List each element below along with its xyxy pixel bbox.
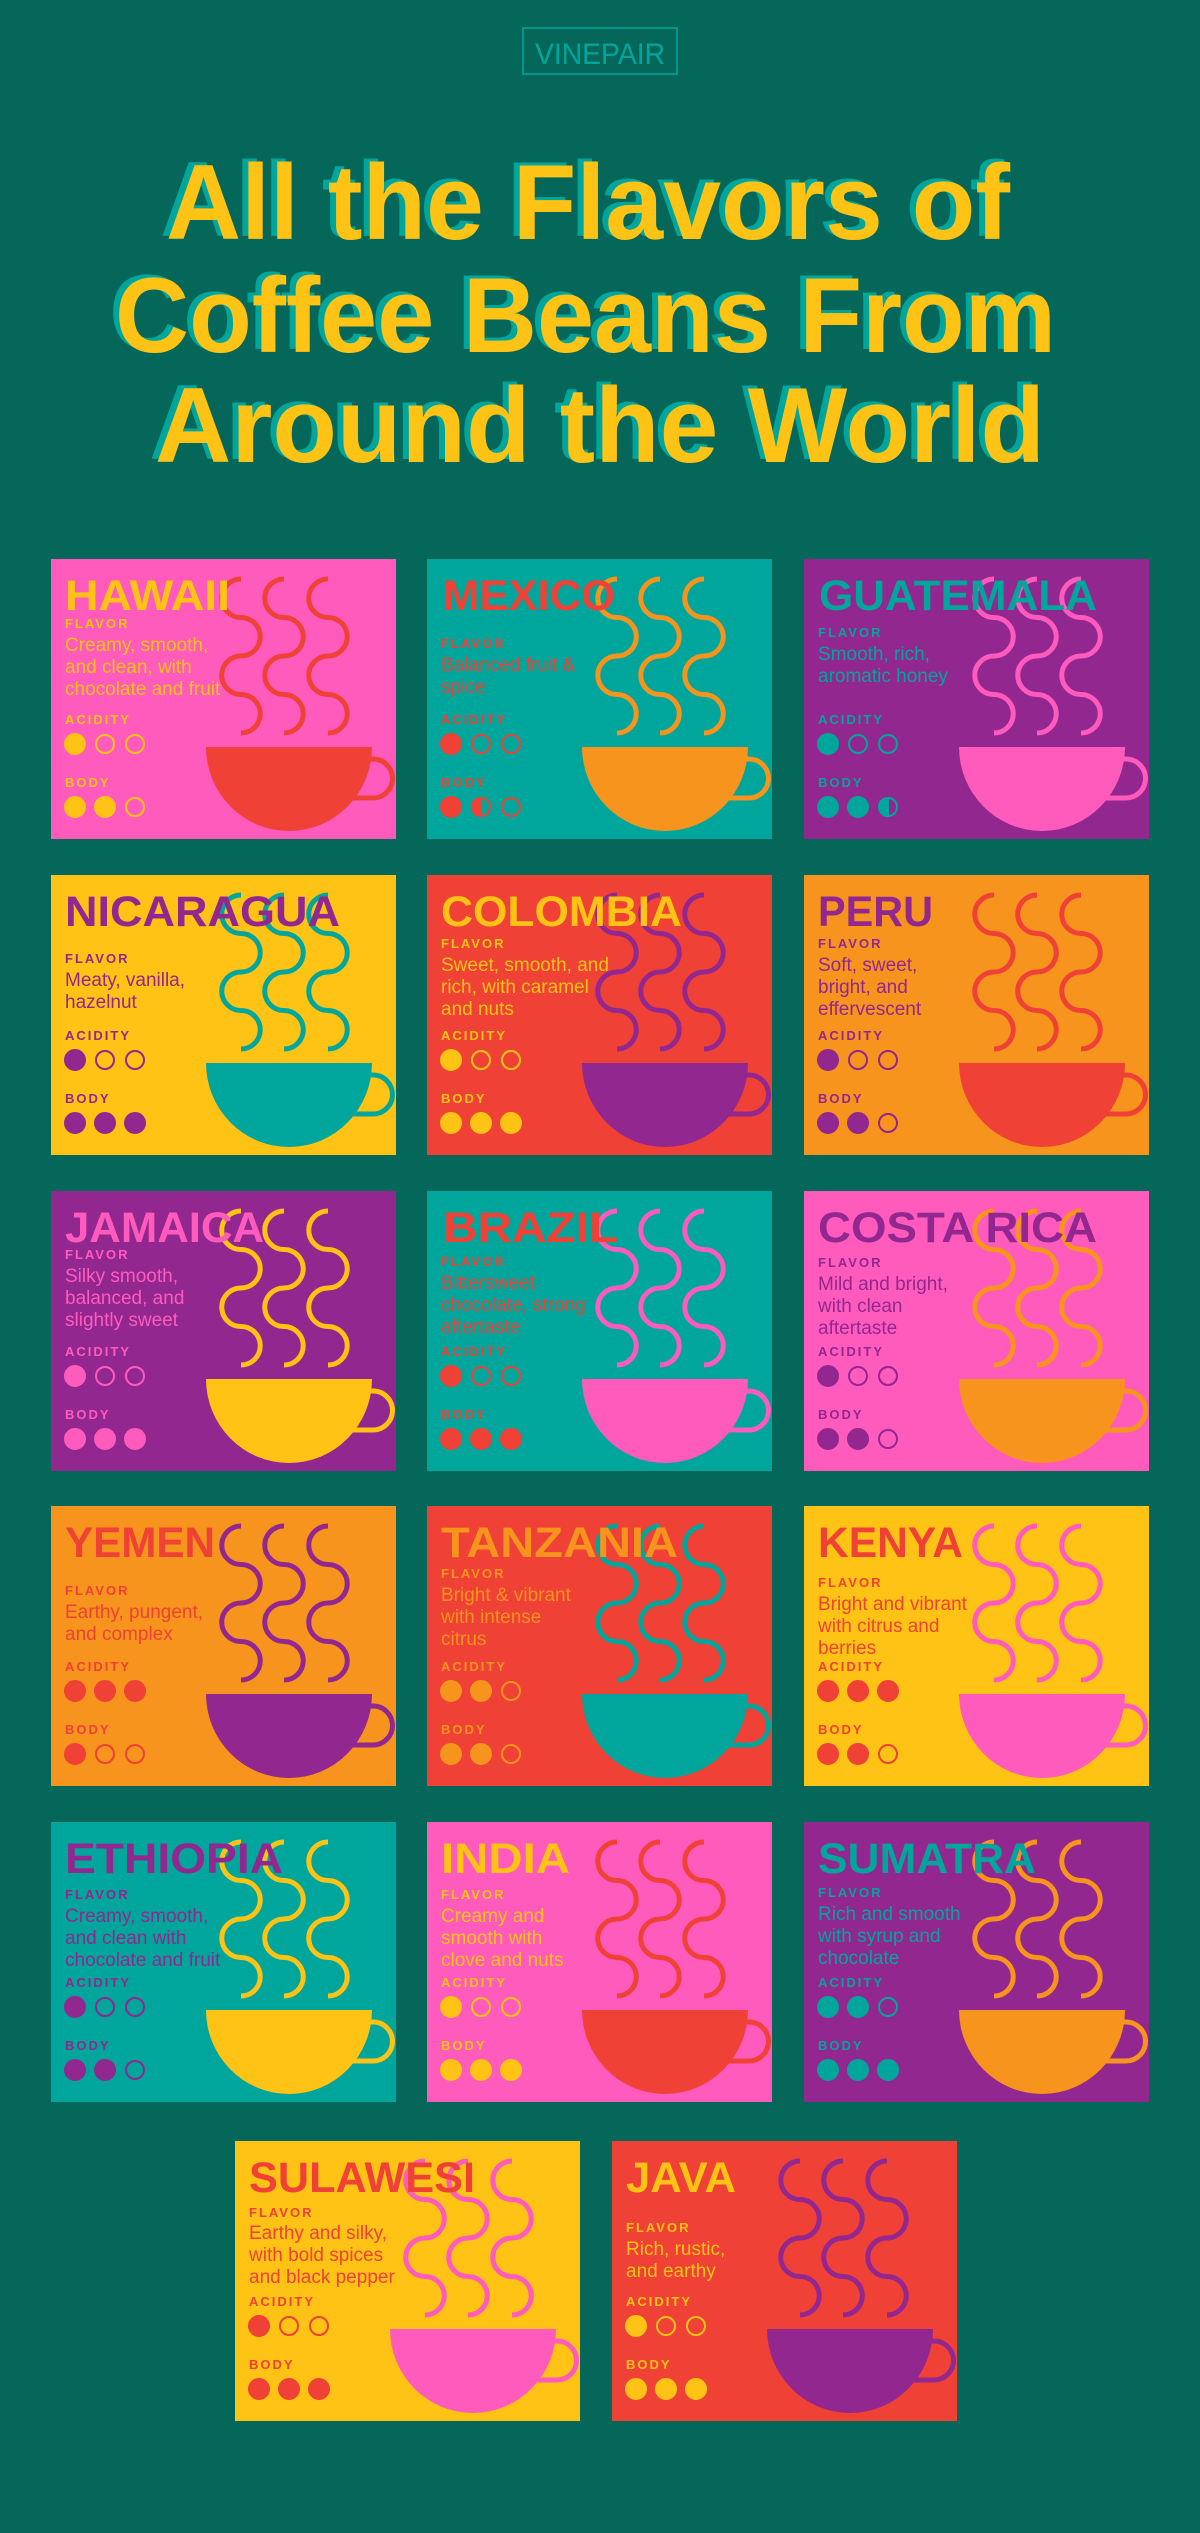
panel: Brazil [427, 1191, 772, 1471]
panel: Brazil: aftertaste [441, 1317, 520, 1338]
panel: Jamaica: BODY [65, 1407, 111, 1422]
panel: India: smooth with [441, 1928, 542, 1949]
panel: Guatemala [804, 559, 1149, 839]
title: Coffee Beans From [109, 252, 1050, 372]
panel: Colombia: rich, with caramel [441, 977, 589, 998]
panel: Mexico [427, 559, 772, 839]
panel: Java: BODY [626, 2357, 672, 2372]
panel: Mexico: spice [441, 677, 485, 698]
panel: Nicaragua: Meaty, vanilla, [65, 970, 185, 991]
panel: Costa Rica: BODY [818, 1407, 864, 1422]
panel: Hawaii: BODY [65, 775, 111, 790]
panel: Brazil: FLAVOR [441, 1254, 505, 1269]
panel: Yemen: Earthy, pungent, [65, 1602, 203, 1623]
panel: Sumatra: FLAVOR [818, 1885, 882, 1900]
panel: Mexico: ACIDITY [441, 712, 507, 727]
panel: Java [612, 2141, 957, 2421]
panel: Jamaica: slightly sweet [65, 1310, 179, 1331]
panel: Costa Rica: Mild and bright, [818, 1274, 948, 1295]
panel: Nicaragua: hazelnut [65, 992, 138, 1013]
panel: Tanzania: ACIDITY [441, 1659, 507, 1674]
panel: Brazil: BRAZIL [443, 1204, 618, 1252]
panel: Sumatra: with syrup and [817, 1926, 941, 1947]
panel: Guatemala: GUATEMALA [819, 572, 1097, 620]
logo: VinePair [523, 28, 677, 74]
panel: India: Creamy and [441, 1906, 544, 1927]
panel: Jamaica: ACIDITY [65, 1344, 131, 1359]
panel: Kenya: FLAVOR [818, 1575, 882, 1590]
panel: Nicaragua: ACIDITY [65, 1028, 131, 1043]
panel: Peru: ACIDITY [818, 1028, 884, 1043]
panel: Sulawesi: SULAWESI [249, 2154, 475, 2202]
title: Around the World [149, 362, 1039, 482]
panel: Nicaragua [51, 875, 396, 1155]
panel: Peru: Soft, sweet, [818, 955, 917, 976]
panel: Mexico: Balanced fruit & [441, 655, 575, 676]
panel: Sumatra: BODY [818, 2038, 864, 2053]
panel: Jamaica [51, 1191, 396, 1471]
panel: Tanzania: FLAVOR [441, 1566, 505, 1581]
panel: Jamaica: balanced, and [65, 1288, 184, 1309]
panel: Yemen: ACIDITY [65, 1659, 131, 1674]
panel: Sulawesi: FLAVOR [249, 2205, 313, 2220]
panel: Java: Rich, rustic, [626, 2239, 725, 2260]
panel: Sulawesi [235, 2141, 580, 2421]
panel: India: INDIA [441, 1835, 570, 1883]
panel: Kenya: ACIDITY [818, 1659, 884, 1674]
panel: Hawaii: and clean, with [65, 657, 192, 678]
panel: Peru: effervescent [818, 999, 922, 1020]
panel: Ethiopia: Creamy, smooth, [65, 1906, 208, 1927]
panel: Peru: FLAVOR [818, 936, 882, 951]
panel: Sulawesi: BODY [249, 2357, 295, 2372]
panel: Colombia: and nuts [441, 999, 514, 1020]
title: All the Flavors of [160, 139, 1004, 259]
panel: Tanzania: Bright & vibrant [441, 1585, 572, 1606]
panel: Costa Rica: ACIDITY [818, 1344, 884, 1359]
panel: India [427, 1822, 772, 2102]
panel: Ethiopia: ACIDITY [65, 1975, 131, 1990]
panel: Sulawesi: Earthy and silky, [249, 2223, 387, 2244]
panel: Tanzania: TANZANIA [441, 1519, 678, 1567]
panel: Ethiopia: FLAVOR [65, 1887, 129, 1902]
panel: Sumatra: Rich and smooth [818, 1904, 961, 1925]
panel: India: clove and nuts [441, 1950, 564, 1971]
panel: Tanzania: BODY [441, 1722, 487, 1737]
panel: Guatemala: aromatic honey [818, 666, 948, 687]
panel: Colombia [427, 875, 772, 1155]
panel: Jamaica: Silky smooth, [65, 1266, 178, 1287]
panel: Kenya [804, 1506, 1149, 1786]
panel: Kenya: BODY [818, 1722, 864, 1737]
panel: Nicaragua: BODY [65, 1091, 111, 1106]
panel: Mexico: FLAVOR [441, 636, 505, 651]
panel: Brazil: Bittersweet [441, 1273, 536, 1294]
panel: Mexico: BODY [441, 775, 487, 790]
panel: Costa Rica: FLAVOR [818, 1255, 882, 1270]
panel: Ethiopia: BODY [65, 2038, 111, 2053]
panel: Kenya: Bright and vibrant [818, 1594, 968, 1615]
panel: Colombia: Sweet, smooth, and [441, 955, 609, 976]
panel: Colombia: COLOMBIA [441, 888, 682, 936]
panel: Tanzania: citrus [441, 1629, 486, 1650]
panel: Hawaii [51, 559, 396, 839]
title: Around the World [155, 365, 1045, 485]
panel: India: ACIDITY [441, 1975, 507, 1990]
panel: Kenya: berries [818, 1638, 876, 1659]
panel: Colombia: ACIDITY [441, 1028, 507, 1043]
panel: Peru: PERU [818, 888, 933, 936]
panel: Peru [804, 875, 1149, 1155]
panel: Ethiopia: and clean with [65, 1928, 186, 1949]
panel: Java: FLAVOR [626, 2220, 690, 2235]
panel: Costa Rica: COSTA RICA [818, 1204, 1097, 1252]
panel: Ethiopia [51, 1822, 396, 2102]
panel: Brazil: BODY [441, 1407, 487, 1422]
panel: Yemen [51, 1506, 396, 1786]
panel: Hawaii: FLAVOR [65, 616, 129, 631]
panel: Yemen: BODY [65, 1722, 111, 1737]
panel: Colombia: BODY [441, 1091, 487, 1106]
panel: Sumatra [804, 1822, 1149, 2102]
panel: India: FLAVOR [441, 1887, 505, 1902]
panel: Peru: BODY [818, 1091, 864, 1106]
panel: Ethiopia: chocolate and fruit [65, 1950, 221, 1971]
panel: Costa Rica: with clean [817, 1296, 902, 1317]
panel: Colombia: FLAVOR [441, 936, 505, 951]
panel: Costa Rica [804, 1191, 1149, 1471]
panel: Java: ACIDITY [626, 2294, 692, 2309]
panel: Brazil: chocolate, strong [441, 1295, 586, 1316]
panel: Kenya: with citrus and [817, 1616, 939, 1637]
panel: Hawaii: HAWAII [65, 572, 230, 620]
panel: India: BODY [441, 2038, 487, 2053]
panel: Brazil: ACIDITY [441, 1344, 507, 1359]
panel: Nicaragua: NICARAGUA [65, 888, 340, 936]
panel: Hawaii: ACIDITY [65, 712, 131, 727]
panel: Sumatra: chocolate [818, 1948, 899, 1969]
panel: Tanzania [427, 1506, 772, 1786]
panel: Mexico: MEXICO [443, 572, 615, 620]
panel: Guatemala: FLAVOR [818, 625, 882, 640]
panel: Yemen: YEMEN [65, 1519, 215, 1567]
panel: Java: JAVA [626, 2154, 736, 2202]
panel: Sumatra: ACIDITY [818, 1975, 884, 1990]
panel: Guatemala: Smooth, rich, [818, 644, 930, 665]
panel: Hawaii: chocolate and fruit [65, 679, 221, 700]
panel: Nicaragua: FLAVOR [65, 951, 129, 966]
panel: Yemen: and complex [65, 1624, 173, 1645]
panel: Jamaica: FLAVOR [65, 1247, 129, 1262]
title [109, 139, 1056, 485]
logo: VinePair: VINEPAIR [535, 38, 665, 71]
panel: Jamaica: JAMAICA [65, 1204, 264, 1252]
title: All the Flavors of [166, 142, 1010, 262]
panel: Ethiopia: ETHIOPIA [65, 1835, 283, 1883]
panel: Sulawesi: with bold spices [248, 2245, 383, 2266]
panel: Kenya: KENYA [818, 1519, 963, 1567]
panel: Java: and earthy [626, 2261, 716, 2282]
panel: Costa Rica: aftertaste [818, 1318, 897, 1339]
panel: Peru: bright, and [818, 977, 908, 998]
panel: Guatemala: ACIDITY [818, 712, 884, 727]
panel: Sulawesi: ACIDITY [249, 2294, 315, 2309]
panel: Tanzania: with intense [440, 1607, 541, 1628]
panel: Guatemala: BODY [818, 775, 864, 790]
panel: Yemen: FLAVOR [65, 1583, 129, 1598]
panel: Hawaii: Creamy, smooth, [65, 635, 208, 656]
title: Coffee Beans From [115, 255, 1056, 375]
panel: Sulawesi: and black pepper [249, 2267, 395, 2288]
panel: Sumatra: SUMATRA [818, 1835, 1036, 1883]
